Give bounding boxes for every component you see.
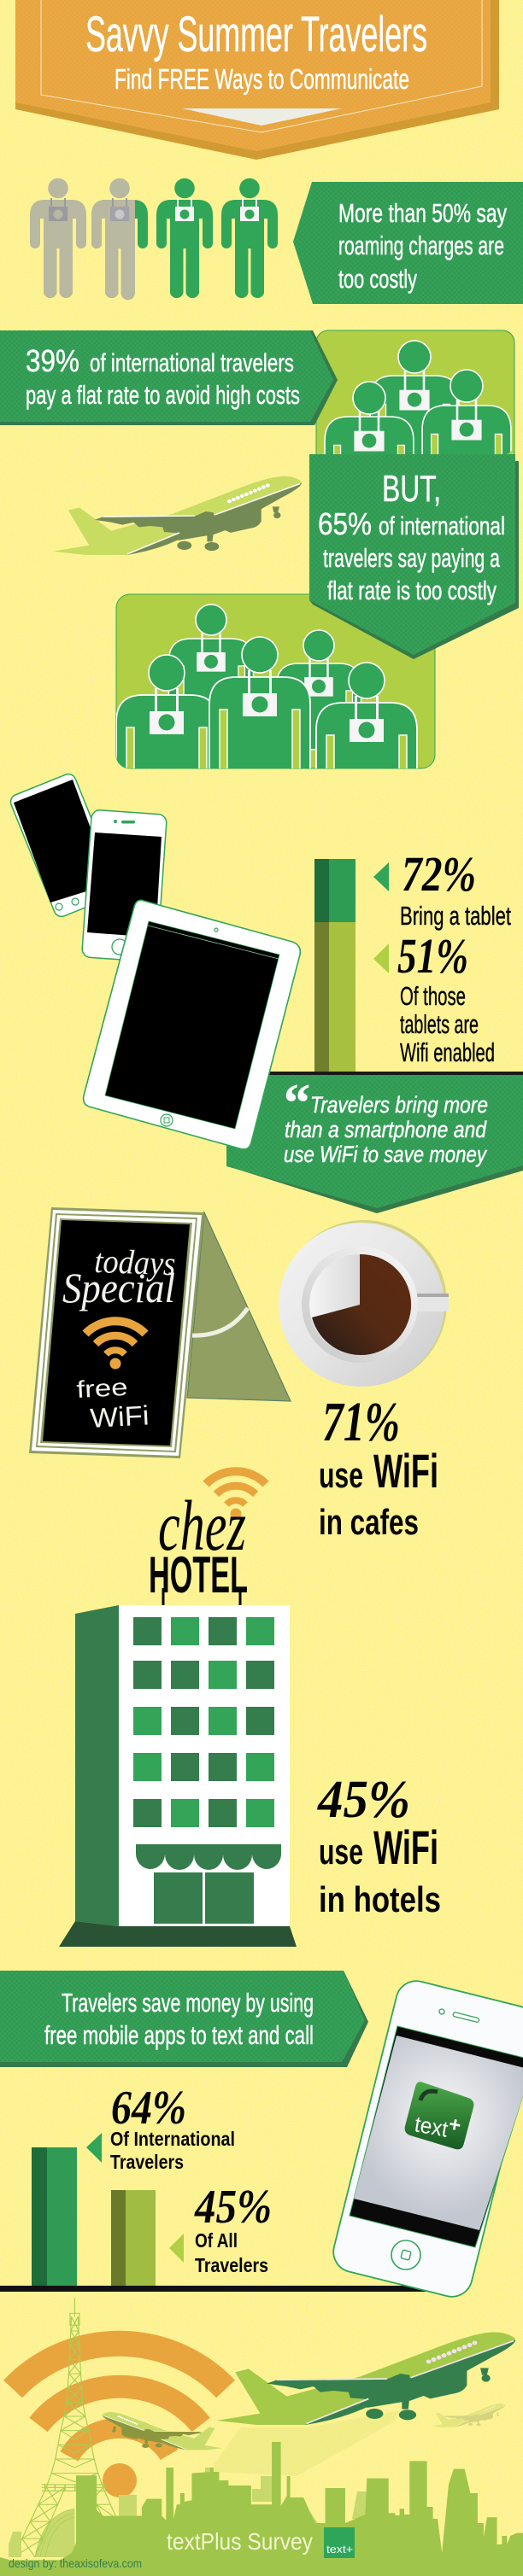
title banner <box>15 0 499 160</box>
quote banner: than a smartphone and <box>285 1117 487 1142</box>
banner: free mobile apps <box>0 1971 368 2067</box>
quote mark: “ <box>284 1074 310 1132</box>
stat: 71 percent cafes <box>319 1391 438 1542</box>
awning <box>136 1844 281 1870</box>
city skyline <box>0 2442 523 2576</box>
sign text <box>62 1241 176 1434</box>
sign text: WiFi <box>89 1399 150 1434</box>
stat: 71 percent cafes: 71% <box>322 1391 400 1453</box>
traveler green 3 <box>156 178 213 298</box>
banner: but 65 percent: 65% <box>318 506 372 541</box>
traveler green 4 <box>221 178 278 298</box>
four traveler icons: 50 percent <box>30 178 278 300</box>
axis line <box>0 2286 444 2292</box>
stat: 72 percent: 72% <box>402 846 476 902</box>
smartphone with app <box>329 1977 523 2301</box>
hotel sign <box>149 1487 248 1605</box>
stat: 45 percent: Of All <box>195 2229 238 2252</box>
banner arrow <box>182 108 342 126</box>
coffee pie 71 percent <box>312 1254 411 1355</box>
panel: five travelers <box>116 594 436 768</box>
phone 1 <box>9 772 121 919</box>
stat: 51 percent <box>397 928 495 1067</box>
panel: three travelers <box>316 330 514 454</box>
quote banner: use WiFi to save money <box>284 1142 487 1167</box>
stat: 72 percent <box>400 846 511 931</box>
arrow: 72 percent <box>373 862 389 891</box>
callout: roaming charges <box>293 182 523 304</box>
stat: 64 percent: Travelers <box>110 2151 184 2173</box>
banner: free mobile apps: Travelers save money by using <box>62 1988 314 2018</box>
textplus logo: text+ <box>326 2543 353 2556</box>
distant airplane <box>432 2404 505 2427</box>
app icon: + <box>447 2112 462 2137</box>
arrow: 51 percent <box>373 943 389 973</box>
callout: roaming charges: too costly <box>338 264 417 294</box>
stat: 45 percent hotels: 45% <box>317 1771 410 1829</box>
home button <box>391 2240 420 2269</box>
stat: 51 percent: 51% <box>397 928 468 984</box>
eiffel tower <box>14 2299 117 2557</box>
footer title: textPlus Survey <box>167 2528 313 2555</box>
stat: 64 percent <box>110 2082 235 2173</box>
stat: 45 percent: Travelers <box>195 2254 268 2276</box>
stat: 64 percent: 64% <box>111 2082 186 2135</box>
banner: 39 percent flat rate: 39% <box>26 343 79 378</box>
chalkboard sign <box>29 1207 291 1458</box>
sign text: Special <box>62 1264 175 1311</box>
banner: 39 percent flat rate <box>0 330 338 425</box>
tablet bar chart <box>314 859 356 1072</box>
arrow: 45 percent <box>169 2234 184 2263</box>
stat: 45 percent hotels: in hotels <box>319 1879 441 1919</box>
arrow: 64 percent <box>86 2133 102 2163</box>
stat: 64 percent: Of International <box>110 2128 235 2150</box>
quote banner <box>226 1072 523 1213</box>
traveler gray 1 <box>30 178 86 298</box>
stat: 45 percent: 45% <box>194 2181 272 2234</box>
bar: 64 percent <box>32 2147 77 2286</box>
big airplane <box>217 2332 515 2425</box>
plane trail <box>214 2410 400 2476</box>
quote banner: Travelers bring more <box>310 1092 488 1118</box>
airplane <box>53 476 302 555</box>
door <box>154 1872 254 1924</box>
hotel sign: HOTEL <box>149 1546 248 1603</box>
sign frame <box>29 1207 204 1458</box>
hotel building <box>59 1605 297 1947</box>
banner: free mobile apps: free mobile apps to text and call <box>44 2020 314 2050</box>
stat: 71 percent cafes: in cafes <box>319 1502 419 1542</box>
stat: 45 percent hotels <box>317 1771 441 1919</box>
app icon: text <box>413 2111 450 2142</box>
design credit: design by: theaxisofeva.com <box>9 2556 142 2570</box>
sign text: free <box>76 1374 128 1403</box>
sign text: todays <box>94 1241 176 1282</box>
stat: 51 percent: Of those <box>400 981 466 1011</box>
textplus logo <box>324 2527 355 2558</box>
background buildings <box>9 2468 372 2557</box>
app icon <box>405 2082 473 2149</box>
banner: 39 percent flat rate: of international travelers <box>90 349 294 377</box>
windows <box>133 1617 274 1827</box>
banner: 39 percent flat rate: pay a flat rate to avoid high costs <box>26 380 300 410</box>
icon: wifi above hotel <box>206 1471 266 1520</box>
bar: 45 percent <box>111 2190 156 2286</box>
banner: but 65 percent: BUT, <box>382 468 441 510</box>
tablet <box>84 900 300 1149</box>
phone 2 <box>82 809 167 962</box>
sign back <box>187 1212 291 1401</box>
mini airplane <box>102 2412 222 2450</box>
stat: 51 percent: tablets are <box>400 1009 479 1039</box>
screen <box>350 2026 523 2247</box>
hotel sign: chez <box>158 1487 246 1566</box>
stat: 71 percent cafes: use <box>319 1455 363 1495</box>
coffee cup <box>279 1220 449 1387</box>
banner: but 65 percent <box>309 454 519 659</box>
stat: 45 percent hotels: WiFi <box>373 1820 438 1874</box>
stat: 45 percent hotels: use <box>319 1831 363 1872</box>
stat: 71 percent cafes: WiFi <box>373 1444 438 1498</box>
icon: wifi on sign <box>85 1321 145 1370</box>
large wifi symbol <box>13 2344 226 2497</box>
stat: 45 percent <box>194 2181 272 2276</box>
traveler half gray <box>91 178 148 300</box>
